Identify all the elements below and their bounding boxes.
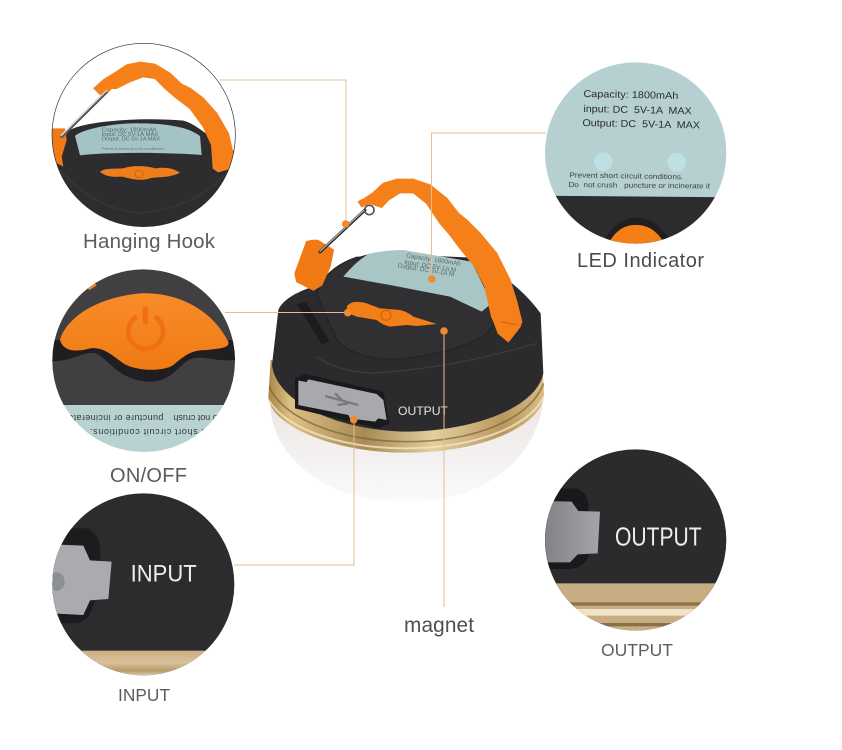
right LED [667,153,686,172]
leader line: on/off [225,309,352,317]
detail circle: on/off button [50,268,240,455]
upside-down warning text [70,413,217,436]
leader line: hanging hook [220,80,350,228]
lantern top in hook detail [50,119,240,228]
warning text: Prevent short circuit conditions. [569,170,683,181]
sticker [63,404,224,452]
upside-down warning text: Prevent short circuit conditions. [90,427,237,437]
power button [347,302,437,327]
label: LED Indicator: LED Indicator [577,250,704,272]
sticker in hook detail: Output: DC 5V-1A MAX [102,136,160,142]
upside-down warning text: puncture or incinerate it [59,413,163,423]
label: magnet: magnet [404,614,474,637]
leader line: input [234,416,358,565]
specification sticker: Capacity: 1800mAh [406,252,462,268]
label: INPUT: INPUT [118,685,170,705]
body contour [317,343,537,373]
lantern OUTPUT print: OUTPUT [398,404,449,418]
orange button [60,293,229,370]
specification text: input: DC 5V-1A MAX [583,104,692,117]
detail circle: output port [542,447,732,633]
port recess [542,488,589,569]
OUTPUT print: OUTPUT [615,522,702,552]
orange button edge [610,225,662,244]
sticker in hook detail: Prevent short circuit conditions. [102,146,165,151]
button recess [605,218,668,244]
gold ring [268,360,544,453]
power symbol [128,307,163,349]
detail circle: hanging hook [50,43,240,228]
specification sticker [343,250,492,312]
warning text [569,172,710,190]
clip in hook detail [50,128,67,167]
gold band [556,583,716,631]
grey port cover [50,544,112,615]
sticker in hook detail [75,123,202,155]
grey port cover [542,501,600,562]
specification sticker: Output: DC 5V-1A M [397,262,455,278]
orange handle [358,179,522,342]
sticker in hook detail: Input: DC 5V-1A MAX [102,132,159,138]
leader line: magnet [440,327,448,607]
specification sticker: Input: DC 5V-1A M [404,259,457,274]
dark lantern edge [556,196,715,244]
warning text: Do not crush puncture or incinerate it [568,180,710,190]
port recess [50,528,100,623]
label: Hanging Hook: Hanging Hook [83,230,216,253]
central lantern product [268,179,544,502]
housing [50,268,240,405]
INPUT print: INPUT [131,561,197,588]
sticker in hook detail: Capacity: 1800mAh [102,128,157,134]
upside-down warning text: Do not crush [173,413,224,423]
specification text [583,90,700,128]
left LED [594,152,613,171]
black housing [50,492,240,678]
detail circle: LED indicator sticker [545,62,726,244]
hanging clip base [295,240,333,290]
cover notch [52,572,65,591]
carabiner wire [320,205,374,252]
button in hook detail [100,166,180,180]
black housing [542,447,732,633]
specification text: Output: DC 5V-1A MAX [582,118,700,131]
small orange mark [87,283,97,290]
raised top plate [317,257,495,359]
USB port cover [295,374,389,428]
gold band [81,650,206,676]
detail circle: input port [49,492,240,678]
wire in hook detail [61,90,107,137]
lantern diffuser dome [270,400,543,502]
sticker surface [542,58,732,198]
leader line: LED indicator [428,133,546,283]
raised ridge in hook detail [60,170,227,213]
handle in hook detail [94,62,233,172]
dark wave shadow [50,340,240,382]
label: ON/OFF: ON/OFF [110,465,187,487]
side slot [297,302,330,344]
lantern black body [272,253,543,432]
specification text: Capacity: 1800mAh [583,89,678,102]
label: OUTPUT: OUTPUT [601,640,673,660]
